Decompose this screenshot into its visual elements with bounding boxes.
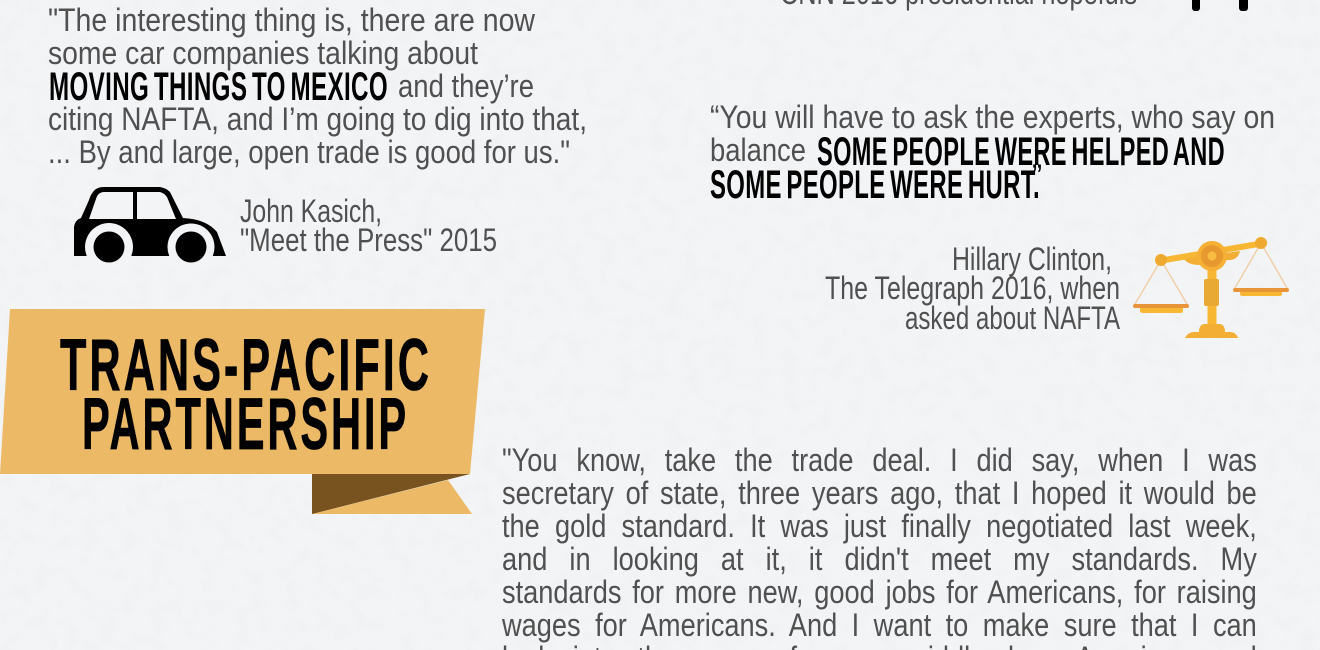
banner tail light (312, 480, 472, 514)
icon: golden scales (1133, 237, 1289, 338)
quote: Hillary Clinton: balance (710, 132, 806, 168)
attribution: Hillary Clinton: Hillary Clinton, (952, 241, 1112, 277)
icon: car (74, 187, 226, 271)
attribution: John Kasich: "Meet the Press" 2015 (240, 222, 497, 258)
text block: TPP quote: secretary of state, three years ago, that I hoped it would be (502, 475, 1257, 511)
heading: Trans-Pacific: TRANS-PACIFIC (60, 325, 432, 406)
text block: TPP quote: "You know, take the trade deal. I did say, when I was (502, 442, 1257, 478)
icon: legs of cropped top icon (1192, 0, 1248, 11)
banner body (0, 309, 485, 474)
text block: TPP quote: and in looking at it, it didn't meet my standards. My (502, 541, 1257, 577)
quote: John Kasich: and they’re (398, 68, 534, 104)
quote: John Kasich: "The interesting thing is, there are now (48, 2, 536, 38)
quote: Hillary Clinton: SOME PEOPLE WERE HURT. (710, 163, 1040, 207)
quote: Hillary Clinton: ” (1032, 158, 1042, 194)
quote: John Kasich (48, 2, 587, 170)
quote: John Kasich: citing NAFTA, and I’m going to dig into that, (48, 101, 587, 137)
attribution: Hillary Clinton: The Telegraph 2016, when (825, 270, 1120, 306)
text block: TPP quote: the gold standard. It was just finally negotiated last week, (502, 508, 1257, 544)
quote: Hillary Clinton (710, 99, 1275, 207)
attribution: John Kasich: John Kasich, (240, 193, 382, 229)
quote: John Kasich: ... By and large, open trade is good for us." (48, 134, 570, 170)
attribution: Hillary Clinton: asked about NAFTA (905, 300, 1120, 336)
attribution: John Kasich (240, 193, 497, 258)
quote: John Kasich: MOVING THINGS TO MEXICO (49, 65, 388, 109)
text block: TPP quote: wages for Americans. And I want to make sure that I can (502, 607, 1257, 643)
heading: Partnership: PARTNERSHIP (82, 384, 409, 465)
banner tail fold (312, 474, 470, 514)
text block: TPP quote: standards for more new, good jobs for Americans, for raising (502, 574, 1257, 610)
attribution: Hillary Clinton (825, 241, 1120, 336)
text block: TPP quote (502, 442, 1257, 650)
quote: John Kasich: some car companies talking about (48, 35, 478, 71)
banner: Trans-Pacific Partnership (0, 309, 485, 514)
